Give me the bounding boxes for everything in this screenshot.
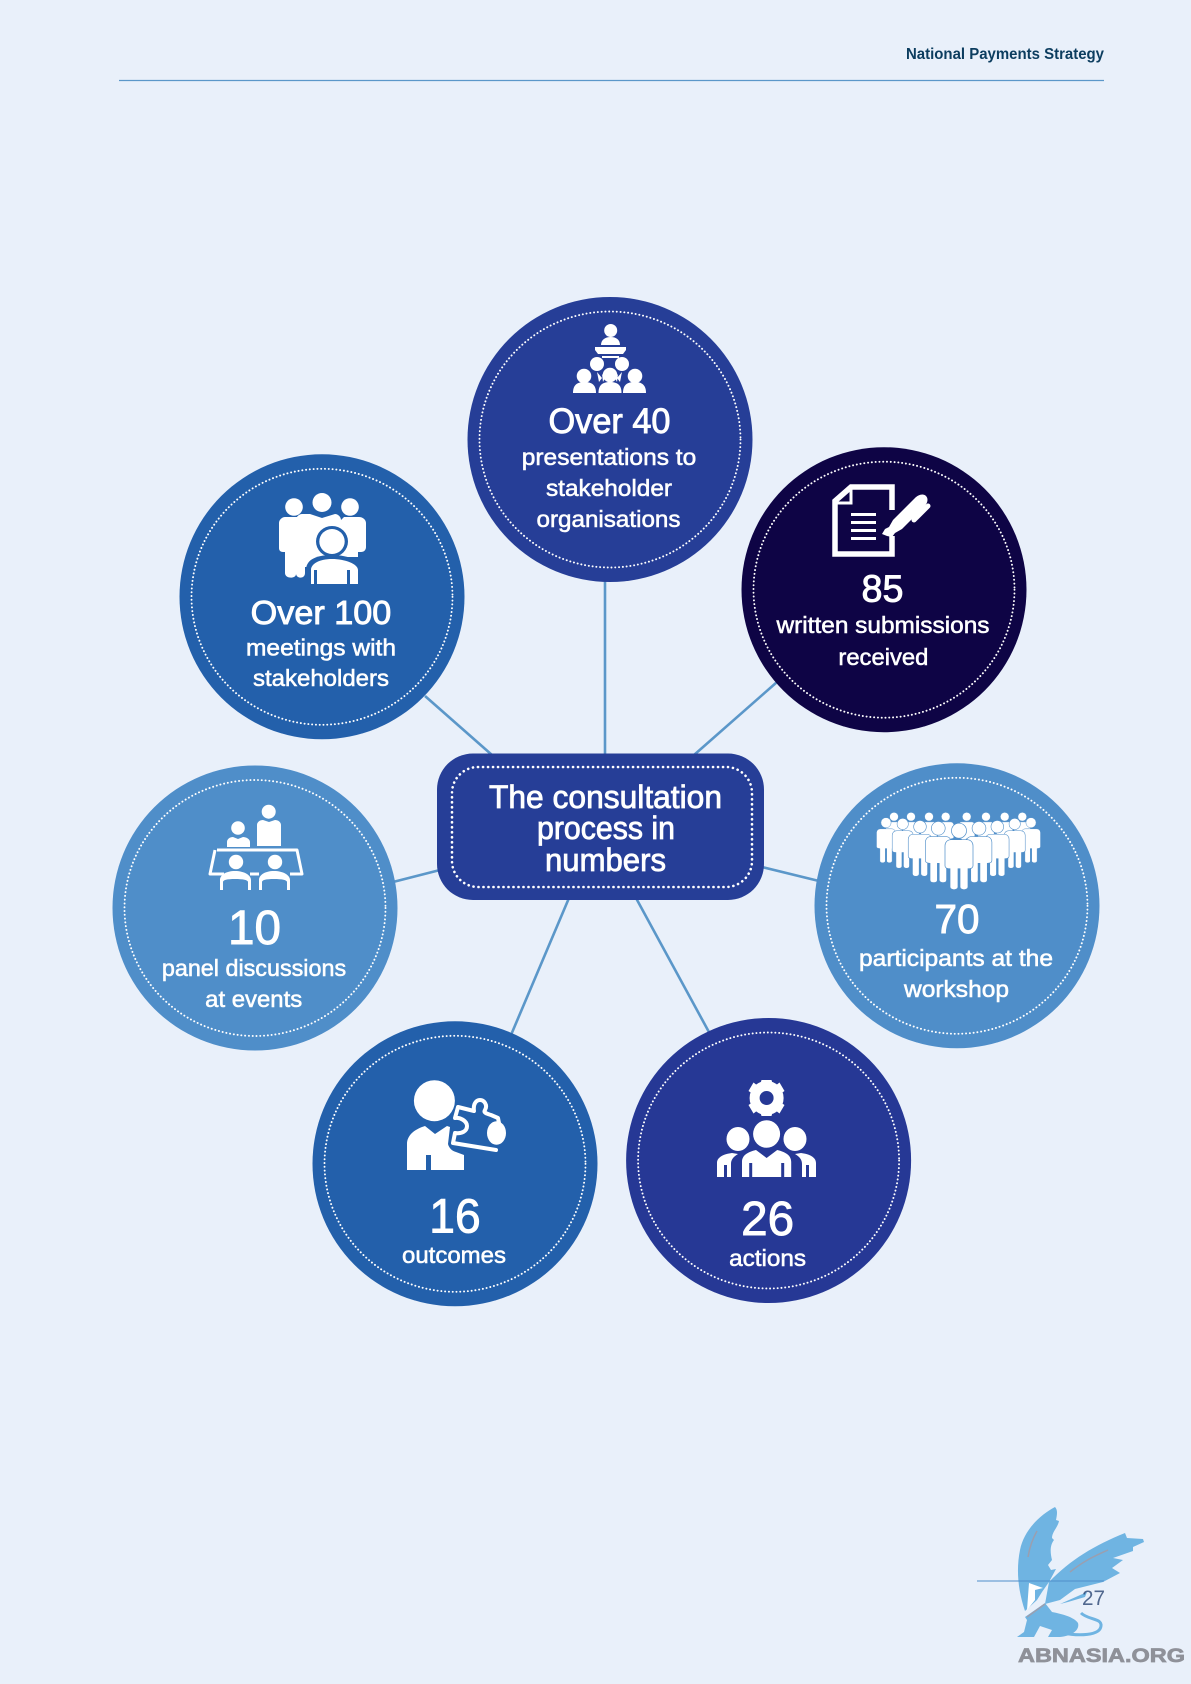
node: written submissions: 85 <box>862 569 904 611</box>
node: workshop participants: participants at the <box>859 945 1053 971</box>
icon: group of people <box>279 493 366 584</box>
node: written submissions: written submissions <box>775 612 990 638</box>
node: panel discussions: 10 <box>228 902 281 955</box>
node: workshop participants: 70 <box>934 896 980 942</box>
node: presentations: stakeholder <box>546 475 672 501</box>
node: actions: 26 <box>741 1193 794 1246</box>
central box: The consultation <box>489 779 722 815</box>
watermark text: ABNASIA.ORG <box>1018 1646 1185 1667</box>
griffin logo watermark <box>1017 1507 1144 1637</box>
node: presentations: Over 40 <box>548 402 670 441</box>
connector lines <box>393 580 819 1035</box>
node: workshop participants <box>814 763 1100 1048</box>
node: meetings: stakeholders <box>253 665 389 691</box>
node: panel discussions <box>112 766 398 1050</box>
node: meetings: Over 100 <box>251 594 391 631</box>
node: panel discussions: panel discussions <box>162 955 346 981</box>
icon: person with puzzle piece <box>407 1080 506 1170</box>
central box: numbers <box>545 842 666 878</box>
page number: 27 <box>1082 1587 1105 1610</box>
node: presentations <box>468 297 752 582</box>
page number <box>977 1581 1105 1610</box>
page header: National Payments Strategy <box>906 46 1104 63</box>
icon: presenter and audience <box>573 324 646 393</box>
node: actions <box>626 1018 911 1303</box>
central box: process in <box>537 810 675 846</box>
node: presentations: presentations to <box>522 444 696 470</box>
node: presentations: organisations <box>536 506 680 532</box>
node: outcomes: 16 <box>429 1191 481 1244</box>
node: written submissions <box>742 447 1026 732</box>
icon: team with gear <box>717 1080 816 1177</box>
node: outcomes <box>312 1021 598 1306</box>
central box <box>437 754 764 900</box>
node: actions: actions <box>729 1245 806 1271</box>
node: written submissions: received <box>838 644 928 670</box>
node: meetings <box>180 454 464 739</box>
node: outcomes: outcomes <box>402 1242 506 1268</box>
icon: crowd of people <box>876 812 1041 890</box>
node: workshop participants: workshop <box>903 976 1009 1002</box>
icon: panel table <box>210 805 302 890</box>
node: panel discussions: at events <box>205 986 302 1012</box>
icon: document and pen <box>834 486 928 554</box>
node: meetings: meetings with <box>246 634 396 660</box>
